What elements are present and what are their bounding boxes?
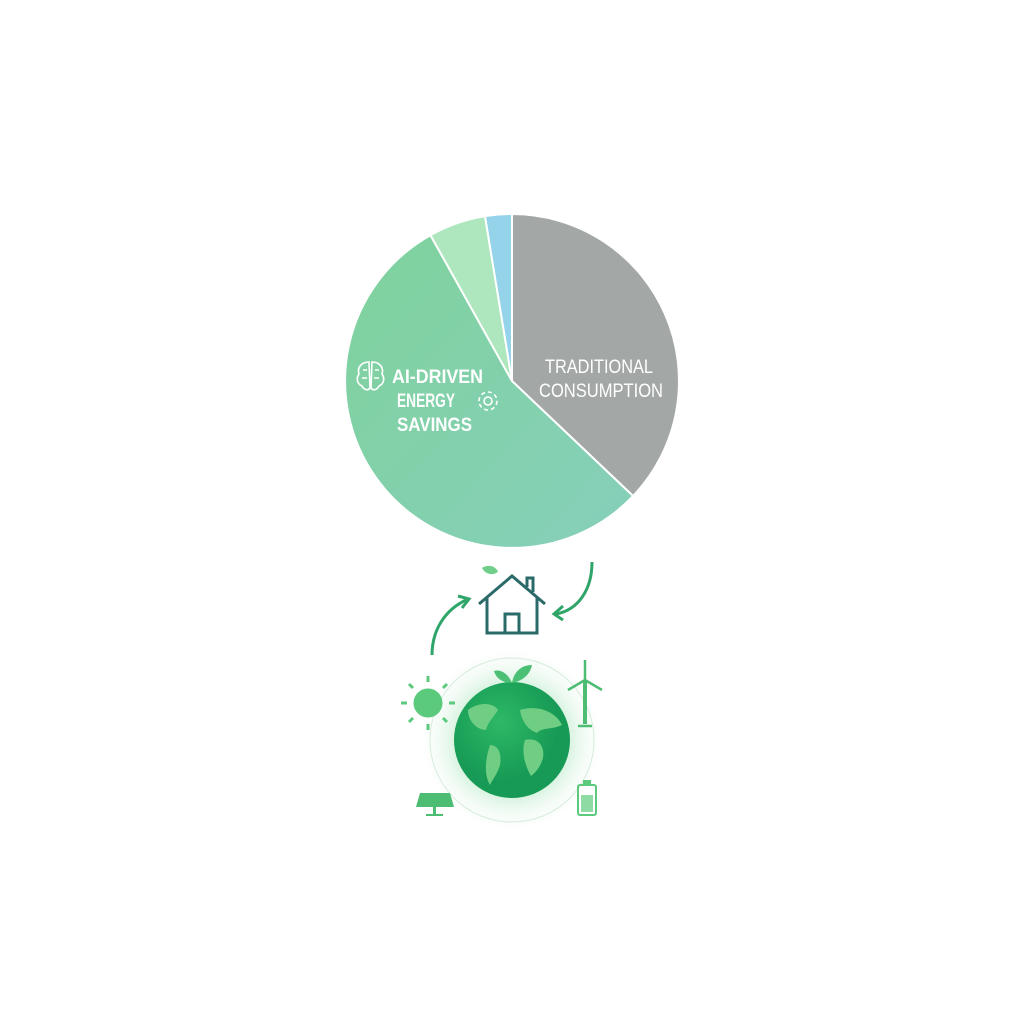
icon: globe bbox=[454, 682, 570, 798]
label: traditional consumption: TRADITIONAL bbox=[545, 357, 653, 378]
label: traditional consumption: CONSUMPTION bbox=[539, 381, 663, 402]
label: AI-driven energy savings bbox=[392, 367, 483, 436]
icon: wind turbine bbox=[568, 660, 602, 726]
icon: sun bbox=[401, 676, 455, 730]
icon: solar panel bbox=[416, 793, 454, 816]
label: AI-driven energy savings: ENERGY bbox=[397, 391, 455, 412]
arrow: into house bbox=[556, 562, 592, 614]
arrow: up to house bbox=[432, 600, 466, 655]
icon: house with leaf bbox=[479, 566, 545, 633]
pie chart bbox=[345, 214, 679, 548]
icon: brain bbox=[357, 362, 384, 390]
icon: gear bbox=[479, 392, 497, 410]
slice: traditional consumption bbox=[512, 214, 679, 496]
label: traditional consumption bbox=[539, 357, 663, 402]
icon: battery bbox=[578, 781, 596, 815]
icon: sprout bbox=[494, 665, 532, 683]
label: AI-driven energy savings: SAVINGS bbox=[397, 415, 472, 436]
slice: AI-driven energy savings bbox=[345, 235, 633, 548]
slice: light green bbox=[430, 216, 512, 381]
label: AI-driven energy savings: AI-DRIVEN bbox=[392, 367, 483, 388]
slice: blue bbox=[485, 214, 512, 381]
globe cluster bbox=[401, 645, 607, 835]
